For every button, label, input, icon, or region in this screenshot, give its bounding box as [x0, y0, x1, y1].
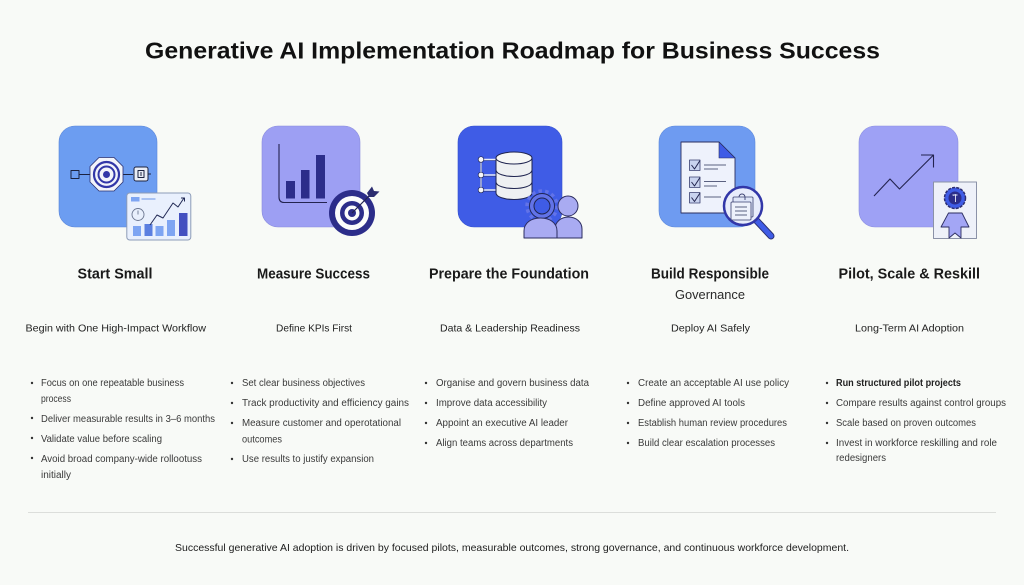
heading: Prepare the Foundation: [429, 266, 589, 282]
bullet list: process: [41, 394, 71, 405]
bullet list: Build clear escalation processes: [638, 438, 775, 449]
heading: Measure Success: [257, 266, 370, 282]
bullet list: Set clear business objectives: [242, 378, 365, 389]
panel: build responsible governance: [627, 126, 789, 449]
subheading: Data & Leadership Readiness: [440, 322, 580, 334]
bullet list: Track productivity and efficiency gains: [242, 398, 409, 409]
bullet list: Deliver measurable results in 3–6 months: [41, 414, 215, 425]
heading: Build Responsible: [651, 266, 769, 282]
subheading: Begin with One High-Impact Workflow: [26, 322, 206, 334]
icon: database, gear and people: [458, 126, 582, 238]
bullet list: Scale based on proven outcomes: [836, 418, 976, 429]
bullet list: Align teams across departments: [436, 438, 573, 449]
bullet list: Focus on one repeatable business: [41, 378, 184, 389]
bullet list: [826, 378, 1006, 464]
bullet list: initially: [41, 470, 71, 481]
heading: Start Small: [78, 266, 152, 282]
heading second line: Governance: [675, 288, 745, 302]
subheading: Deploy AI Safely: [671, 322, 751, 334]
bullet list: [31, 378, 215, 481]
bullet list: Create an acceptable AI use policy: [638, 378, 789, 389]
bullet list: [425, 378, 589, 449]
heading: Pilot, Scale & Reskill: [838, 266, 980, 282]
icon: growth arrow and certificate: [859, 126, 976, 238]
bullet list: [627, 378, 789, 449]
bullet list: Run structured pilot projects: [836, 378, 961, 389]
panel: pilot, scale and reskill: [826, 126, 1006, 464]
bullet list: Avoid broad company-wide rollootuss: [41, 454, 202, 465]
bullet list: outcomes: [242, 434, 282, 446]
bullet list: Improve data accessibility: [436, 398, 547, 409]
bullet list: Measure customer and operotational: [242, 418, 401, 429]
bullet list: Define approved AI tools: [638, 398, 745, 409]
bullet list: Validate value before scaling: [41, 434, 162, 445]
panel: measure success: [231, 126, 409, 465]
bullet list: Appoint an executive AI leader: [436, 418, 569, 429]
icon: target workflow and dashboard: [59, 126, 191, 240]
bullet list: [231, 378, 409, 465]
title: Generative AI Implementation Roadmap for Business Success: [145, 38, 880, 64]
subheading: Define KPIs First: [276, 322, 352, 334]
bullet list: Establish human review procedures: [638, 418, 787, 429]
bullet list: Compare results against control groups: [836, 398, 1006, 409]
icon: checklist and magnifier: [659, 126, 771, 236]
icon: bar chart and target: [262, 126, 380, 236]
panel: prepare the foundation: [425, 126, 589, 449]
subheading: Long-Term AI Adoption: [855, 322, 964, 334]
bullet list: redesigners: [836, 453, 886, 464]
panel: start small: [26, 126, 215, 481]
bullet list: Organise and govern business data: [436, 378, 589, 389]
bullet list: Use results to justify expansion: [242, 454, 374, 465]
bullet list: Invest in workforce reskilling and role: [836, 438, 997, 449]
footer summary: Successful generative AI adoption is driven by focused pilots, measurable outcomes, strong governance, and continuous workforce development.: [175, 542, 849, 554]
